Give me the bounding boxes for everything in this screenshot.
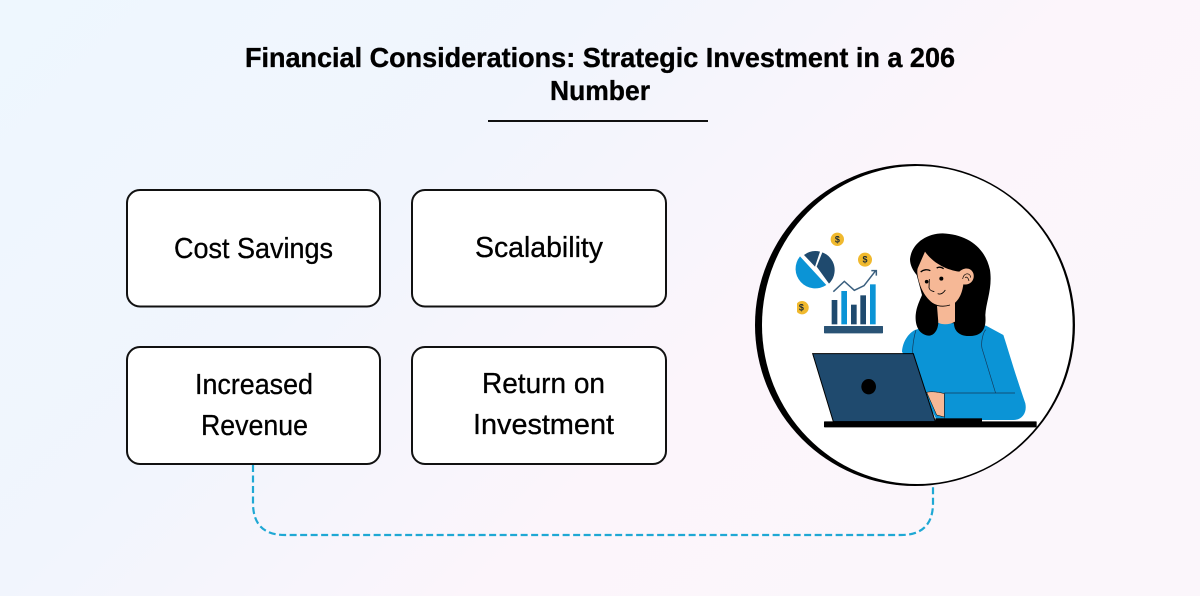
card: Return on Investment: Investment [473,409,614,441]
icon: dollar coins: $ [835,234,840,244]
desk [824,418,1037,427]
title underline [488,120,708,122]
card: Increased Revenue: Revenue [201,410,308,442]
sweater seams [912,330,1015,418]
title [245,42,955,106]
card: Increased Revenue [127,347,380,464]
dashed connector [253,465,933,535]
title: Number [550,75,650,106]
woman figure [902,233,1026,420]
icon: dollar coins [797,233,872,314]
card: Increased Revenue: Increased [195,369,313,401]
card: Scalability: Scalability [475,232,603,264]
illustration: woman at laptop with charts [755,164,1075,486]
icon: dollar coins: $ [799,303,804,313]
card: Scalability [412,190,666,306]
circle frame [755,164,1075,486]
bar chart [824,271,883,333]
neck and face [937,302,955,324]
card: Return on Investment [412,347,666,464]
icon: pie chart [796,251,835,288]
icon: dollar coins: $ [862,255,867,265]
card: Cost Savings [127,190,380,306]
card: Cost Savings: Cost Savings [174,233,333,265]
sweater [902,323,1026,420]
title: Financial Considerations: Strategic Investment in a 206 [245,42,955,73]
laptop [813,354,935,422]
card: Return on Investment: Return on [482,368,605,400]
hair [910,233,991,336]
hand [927,392,944,417]
